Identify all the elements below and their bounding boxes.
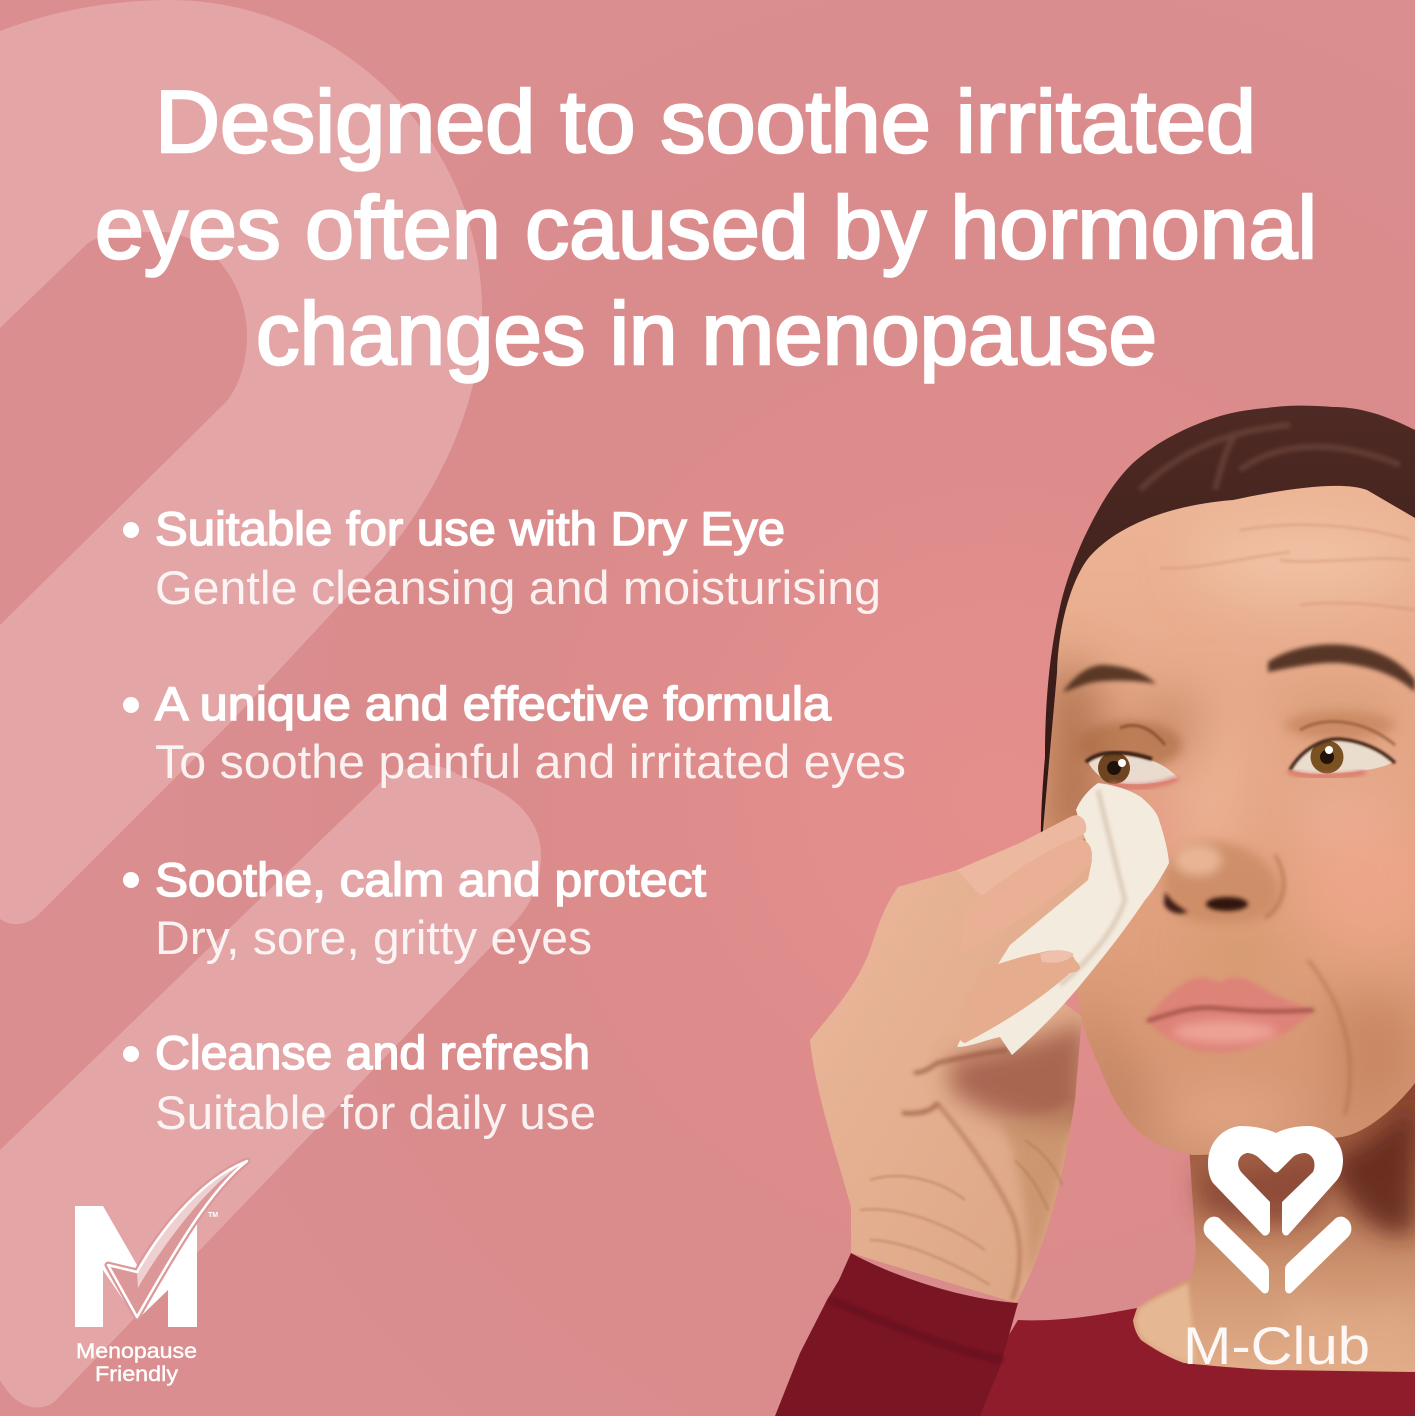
trademark: TM xyxy=(208,1212,218,1219)
hair highlights xyxy=(1140,425,1400,490)
heart and leaves xyxy=(1204,1126,1351,1293)
cuff fold xyxy=(830,1300,1003,1360)
benefit: formula: To soothe painful and irritated eyes xyxy=(155,735,906,788)
neck xyxy=(1133,1060,1415,1372)
logo wording xyxy=(76,1340,197,1386)
nasolabial fold xyxy=(1308,960,1350,1115)
title xyxy=(95,72,1317,383)
right eye socket xyxy=(1285,711,1395,739)
benefit: formula xyxy=(123,677,906,788)
hair xyxy=(1041,406,1415,860)
left eyebrow xyxy=(1063,665,1156,692)
benefit: soothe: Soothe, calm and protect xyxy=(155,853,706,906)
letter M xyxy=(75,1206,197,1327)
benefit: cleanse: Cleanse and refresh xyxy=(155,1026,590,1079)
palm shadow xyxy=(950,1020,1085,1280)
hand xyxy=(810,815,1097,1303)
decorative question mark shape xyxy=(0,0,541,1407)
left eye xyxy=(1086,725,1178,787)
benefit: dry eye: Gentle cleansing and moisturising xyxy=(155,561,881,614)
title: eyes often caused by hormonal xyxy=(95,178,1317,277)
neck shading xyxy=(1196,1100,1415,1372)
benefit: soothe: Dry, sore, gritty eyes xyxy=(155,911,592,964)
shoulder highlight xyxy=(1136,1283,1196,1361)
sleeve xyxy=(775,1253,1018,1416)
shirt body xyxy=(960,1308,1415,1416)
right eyebrow xyxy=(1268,644,1415,692)
check mark xyxy=(108,1161,247,1317)
left eye socket xyxy=(1078,721,1182,769)
benefits list xyxy=(123,502,906,1139)
benefit: formula: A unique and effective formula xyxy=(155,677,832,730)
title: changes in menopause xyxy=(256,284,1157,383)
right eye xyxy=(1288,722,1395,776)
tissue fold xyxy=(1060,790,1125,985)
thumb crease xyxy=(902,1050,1008,1113)
title: Designed to soothe irritated xyxy=(155,72,1256,171)
benefit: cleanse xyxy=(123,1026,596,1139)
tissue xyxy=(957,783,1169,1055)
photo: woman dabbing eye with tissue xyxy=(775,406,1415,1416)
forehead wrinkles xyxy=(1160,525,1415,610)
face xyxy=(1043,486,1415,1155)
logo: Menopause Friendly xyxy=(75,1161,247,1386)
wrist wrinkles xyxy=(860,1140,1062,1285)
logo wording: Friendly xyxy=(95,1363,179,1386)
fingers xyxy=(957,815,1092,1043)
lips xyxy=(1147,977,1314,1052)
benefit: dry eye xyxy=(123,502,881,614)
benefit: dry eye: Suitable for use with Dry Eye xyxy=(155,502,785,555)
benefit: soothe xyxy=(123,853,706,964)
face shading xyxy=(1050,520,1415,1137)
benefit: cleanse: Suitable for daily use xyxy=(155,1086,596,1139)
nose xyxy=(1164,841,1284,923)
logo: M-Club xyxy=(1183,1126,1370,1376)
logo wording: M-Club xyxy=(1183,1317,1370,1376)
logo wording: Menopause xyxy=(76,1340,197,1363)
